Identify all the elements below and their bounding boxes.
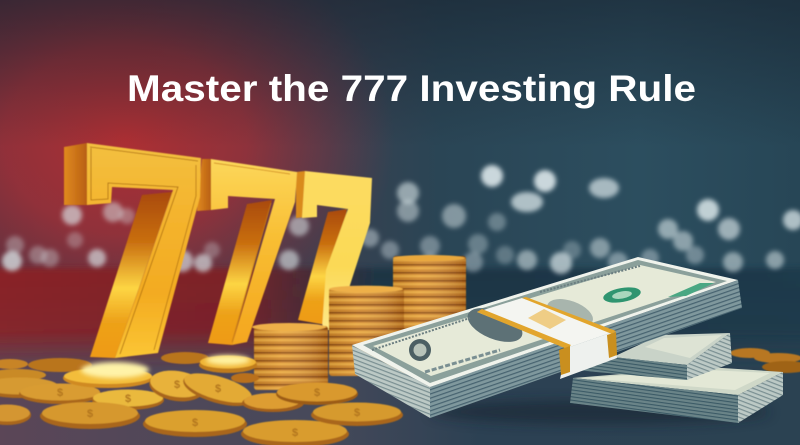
middle money stack (573, 333, 732, 380)
bokeh city lights (2, 165, 800, 274)
third seven (296, 171, 372, 330)
first seven (64, 143, 201, 358)
second seven (197, 159, 297, 345)
glowing coin under first seven (63, 362, 153, 388)
scattered gold coins: $ (125, 393, 131, 405)
scattered gold coins: $ (192, 417, 198, 429)
top money stack (352, 257, 742, 418)
scattered gold coins: $ (292, 427, 298, 439)
stack right (393, 255, 466, 332)
banknote face (363, 260, 727, 383)
golden 777 numerals (64, 143, 372, 358)
title: Master the 777 Investing Rule (127, 68, 696, 109)
gold coin stacks (252, 255, 466, 390)
banknote stacks (352, 257, 783, 424)
scattered gold coins: $ (215, 383, 221, 395)
bottom money stack (570, 367, 783, 423)
scattered gold coins: $ (354, 407, 360, 419)
stack front (252, 323, 328, 390)
glowing coin under second seven (199, 355, 257, 373)
scattered gold coins: $ (87, 408, 93, 420)
scattered gold coins (0, 348, 800, 445)
scattered gold coins: $ (314, 387, 320, 399)
paper currency band (477, 297, 617, 379)
scattered gold coins: $ (57, 387, 63, 399)
stack middle (329, 286, 404, 376)
scattered gold coins: $ (174, 379, 180, 391)
